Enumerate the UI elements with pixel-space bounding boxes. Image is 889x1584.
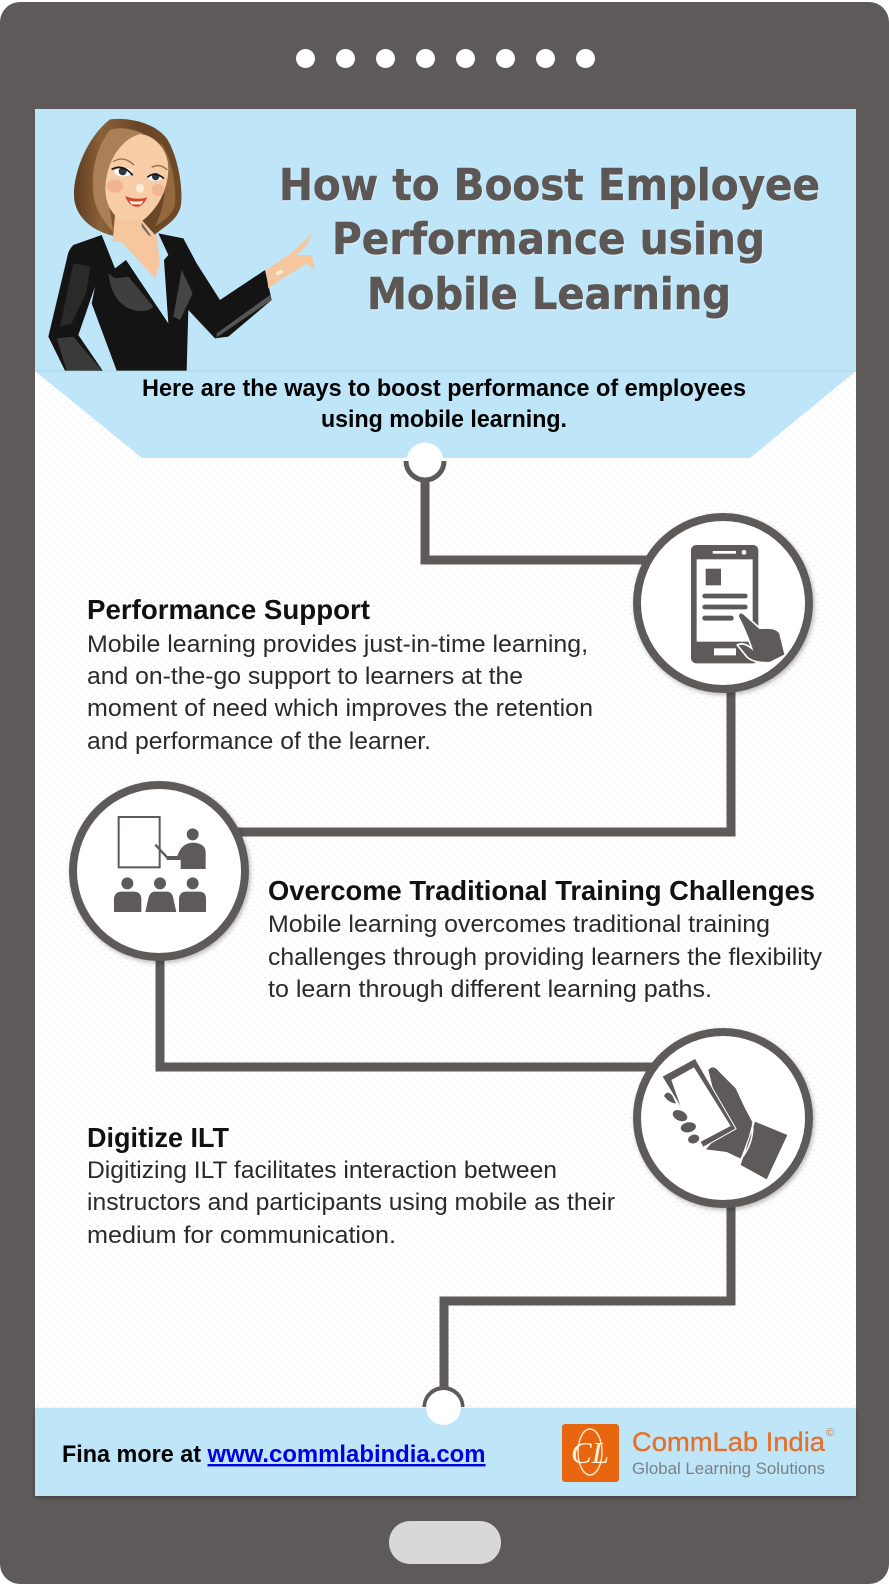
section: performance support xyxy=(87,594,593,755)
title: Mobile Learning xyxy=(367,269,731,320)
section: overcome traditional training challenges: Overcome Traditional Training Challenges xyxy=(268,875,815,906)
CommLab India logo xyxy=(562,1424,834,1482)
section: overcome traditional training challenges: Mobile learning overcomes traditional training xyxy=(268,911,770,938)
section: digitize ILT xyxy=(87,1122,615,1249)
section: performance support: and on-the-go support to learners at the xyxy=(87,663,523,690)
CommLab India logo: © xyxy=(826,1427,834,1439)
section: digitize ILT: Digitize ILT xyxy=(87,1122,229,1153)
CommLab India logo: CL xyxy=(571,1435,609,1470)
footer link text: www.commlabindia.com xyxy=(207,1441,485,1468)
circle icon: classroom trainer xyxy=(73,785,245,957)
woman illustration xyxy=(48,119,315,371)
speaker dots xyxy=(296,49,595,68)
header band xyxy=(35,109,856,371)
footer link text xyxy=(62,1441,486,1468)
connector path 3 xyxy=(160,871,723,1067)
section: performance support: moment of need which improves the retention xyxy=(87,695,593,722)
footer link text: Fina more at xyxy=(62,1441,201,1468)
section: performance support: Performance Support xyxy=(87,594,370,625)
connector path 4 xyxy=(444,1118,731,1407)
section: digitize ILT: instructors and participants using mobile as their xyxy=(87,1189,615,1216)
section: digitize ILT: medium for communication. xyxy=(87,1222,396,1249)
section: performance support: Mobile learning provides just-in-time learning, xyxy=(87,631,588,658)
section: overcome traditional training challenges: to learn through different learning paths. xyxy=(268,976,712,1003)
section: performance support: and performance of the learner. xyxy=(87,728,431,755)
title: Performance using xyxy=(332,214,765,265)
section: digitize ILT: Digitizing ILT facilitates interaction between xyxy=(87,1157,557,1184)
title xyxy=(279,160,820,320)
CommLab India logo: Global Learning Solutions xyxy=(632,1459,825,1478)
start node xyxy=(406,442,444,480)
connector path xyxy=(425,461,723,560)
CommLab India logo: CommLab India xyxy=(632,1427,826,1457)
circle icon: phone with touching hand xyxy=(637,517,809,689)
section: overcome traditional training challenges: challenges through providing learners the flexibility xyxy=(268,944,822,971)
intro text: Here are the ways to boost performance of employees xyxy=(142,375,746,402)
intro text xyxy=(142,375,746,433)
footer band xyxy=(35,1408,856,1496)
section: overcome traditional training challenges xyxy=(268,875,822,1003)
home button xyxy=(389,1521,501,1564)
connector path 2 xyxy=(159,603,731,832)
circle icon: hand holding phone xyxy=(637,1032,809,1204)
intro banner xyxy=(35,371,856,458)
end node xyxy=(425,1388,462,1425)
title: How to Boost Employee xyxy=(279,160,820,211)
intro text: using mobile learning. xyxy=(321,406,567,433)
